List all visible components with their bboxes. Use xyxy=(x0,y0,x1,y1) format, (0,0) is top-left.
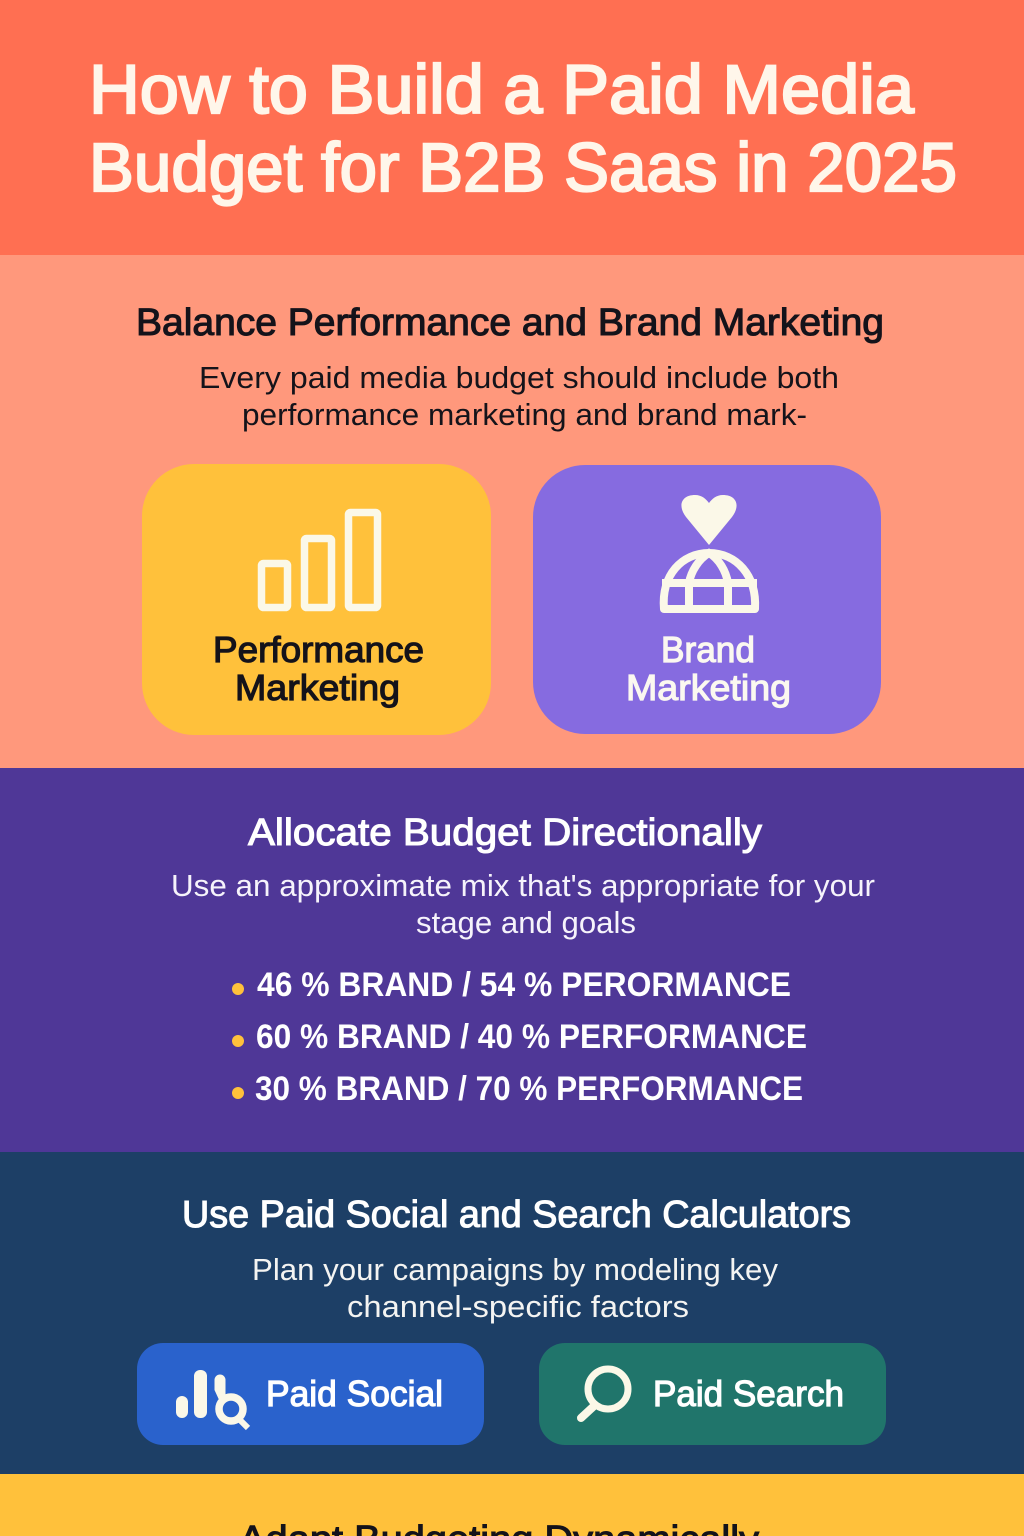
heading: balance: Balance Performance and Brand Marketing xyxy=(136,302,884,344)
panel: calculators xyxy=(0,1152,1024,1474)
text block: allocate intro: stage and goals xyxy=(416,905,636,940)
title xyxy=(89,51,957,206)
card: performance marketing xyxy=(142,464,491,735)
text block: allocate intro xyxy=(171,868,875,940)
icon: bar chart xyxy=(262,512,378,608)
text block: allocate intro: Use an approximate mix that's appropriate for your xyxy=(171,868,875,903)
text block: calculators intro: channel-specific factors xyxy=(347,1289,689,1324)
list: budget mixes: 60 % BRAND / 40 % PERFORMANCE xyxy=(256,1018,807,1056)
title: How to Build a Paid Media xyxy=(89,51,915,128)
label: brand marketing: Brand xyxy=(661,629,755,670)
text block: balance intro: Every paid media budget should include both xyxy=(199,360,839,395)
label: paid search: Paid Search xyxy=(653,1373,844,1414)
text block: balance intro: performance marketing and brand mark- xyxy=(242,397,807,432)
label: performance marketing: Marketing xyxy=(235,667,400,708)
title: Budget for B2B Saas in 2025 xyxy=(89,129,957,206)
panel: adapt budgeting xyxy=(0,1474,1024,1536)
icon: bars with magnifier xyxy=(176,1370,248,1428)
panel: title band xyxy=(0,0,1024,255)
card: brand marketing xyxy=(533,465,881,734)
heading: allocate: Allocate Budget Directionally xyxy=(248,812,762,854)
label: performance marketing: Performance xyxy=(213,629,424,670)
label: brand marketing xyxy=(626,629,791,708)
list: budget mixes xyxy=(232,966,807,1108)
text block: calculators intro xyxy=(252,1252,778,1324)
panel: allocate budget xyxy=(0,768,1024,1152)
icon: magnifier xyxy=(581,1369,628,1418)
text block: balance intro xyxy=(199,360,839,432)
button: paid social xyxy=(137,1343,484,1445)
text block: calculators intro: Plan your campaigns by modeling key xyxy=(252,1252,778,1287)
label: brand marketing: Marketing xyxy=(626,667,791,708)
panel: balance performance and brand xyxy=(0,255,1024,768)
list: budget mixes: 46 % BRAND / 54 % PERORMANCE xyxy=(257,966,791,1004)
heading: calculators: Use Paid Social and Search Calculators xyxy=(182,1194,851,1236)
button: paid search xyxy=(539,1343,886,1445)
icon: heart and globe xyxy=(662,495,757,609)
label: performance marketing xyxy=(213,629,424,708)
list: budget mixes: 30 % BRAND / 70 % PERFORMANCE xyxy=(255,1070,803,1108)
label: paid social: Paid Social xyxy=(266,1373,443,1414)
